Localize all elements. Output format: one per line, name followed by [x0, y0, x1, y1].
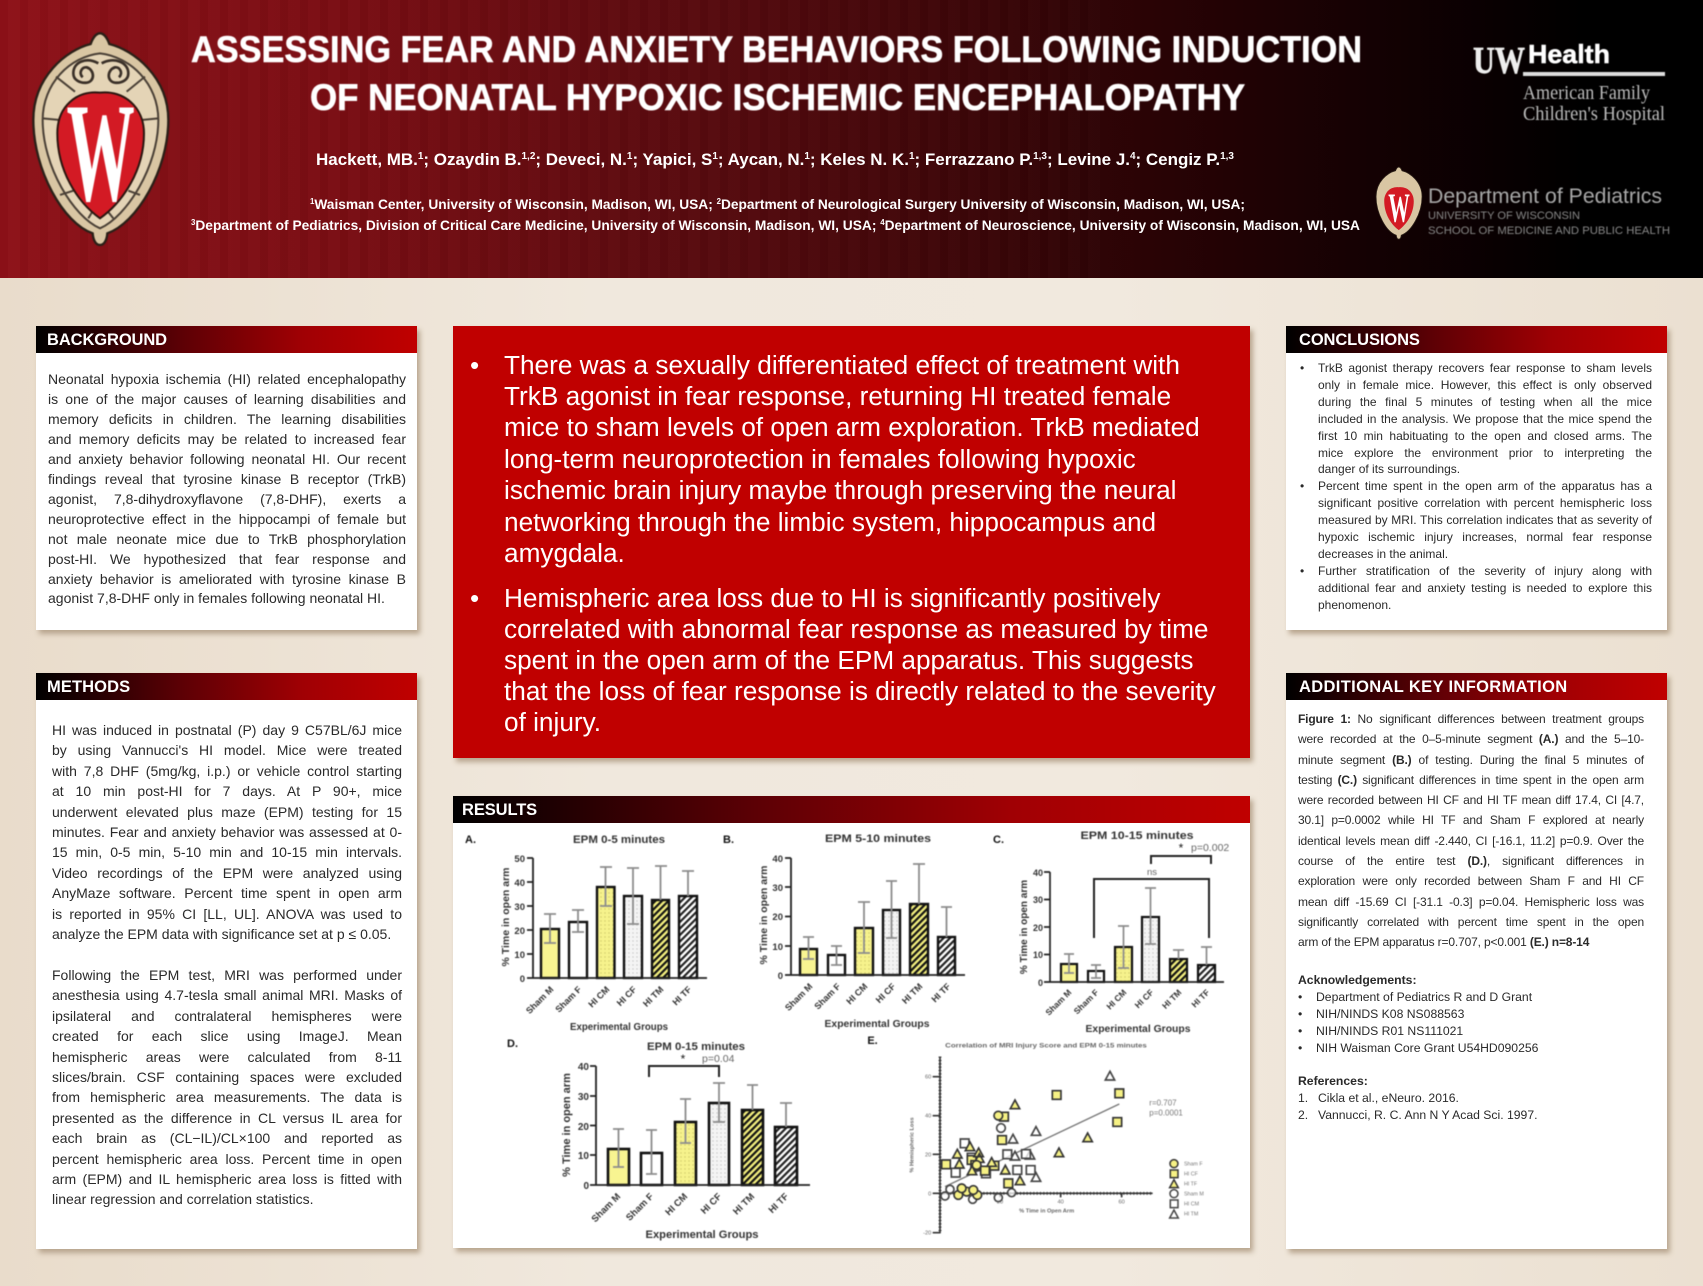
text: methods: underwent elevated plus maze (EPM) testing for 15: [52, 804, 402, 820]
text: acknowledgements: [1298, 973, 1538, 1055]
scatter legend: Sham F: [1184, 1161, 1203, 1167]
affiliations: 2: [717, 197, 721, 206]
chart A: EPM 0-5 minutes: HI CF: [615, 984, 639, 1008]
chart B: EPM 5-10 minutes: 10: [772, 942, 783, 953]
authors: Hackett, MB.: [316, 150, 418, 169]
affiliations: 4: [880, 218, 885, 227]
text: methods: by using Vannucci's HI model. Mice were treated: [52, 742, 402, 758]
text: methods: Video recordings of the EPM were analyzed using: [52, 865, 402, 881]
authors: ; Ferrazzano P.: [915, 150, 1033, 169]
text: acknowledgements: •: [1298, 1007, 1302, 1021]
chart C: EPM 10-15 minutes: 10: [1033, 950, 1043, 960]
text: background: findings reveal that tyrosine kinase B receptor (TrkB): [48, 471, 406, 487]
chart C: EPM 10-15 minutes: HI TF: [1189, 987, 1211, 1009]
chart E: correlation scatter: % Time in Open Arm: [1019, 1208, 1074, 1214]
chart B: EPM 5-10 minutes: % Time in open arm: [758, 866, 770, 964]
chart C: EPM 10-15 minutes: ns: [1147, 867, 1157, 878]
heading: background: [36, 326, 417, 353]
scatter legend: HI TF: [1184, 1181, 1198, 1187]
chart C: EPM 10-15 minutes: 30: [1033, 895, 1043, 905]
title: ASSESSING FEAR AND ANXIETY BEHAVIORS FOLLOWING INDUCTION: [191, 29, 1362, 70]
authors: ; Yapici, S: [632, 150, 712, 169]
chart C: EPM 10-15 minutes: Experimental Groups: [1086, 1024, 1191, 1035]
text: methods: ipsilateral and contralateral hemispheres were: [52, 1008, 402, 1024]
text: figure legend: mean diff -15.69 CI [-31.1 -0.3] p=0.04. Hemispheric loss was: [1298, 895, 1644, 909]
text: conclusions: included in the analysis. We propose that the mice spend the: [1318, 412, 1652, 426]
affiliations: Department of Neurological Surgery University of Wisconsin, Madison, WI, USA;: [721, 196, 1245, 212]
chart C: EPM 10-15 minutes: C.: [993, 834, 1004, 846]
chart E: correlation scatter: 0: [928, 1191, 931, 1197]
scatter legend: HI CM: [1184, 1201, 1199, 1207]
heading: results: RESULTS: [462, 801, 537, 819]
text: figure legend: [1298, 712, 1644, 949]
text: figure legend: Figure 1: No significant differences between treatment groups: [1298, 712, 1644, 726]
chart D: EPM 0-15 minutes: EPM 0-15 minutes: [647, 1041, 745, 1053]
chart B: EPM 5-10 minutes: 40: [772, 854, 783, 865]
chart B: EPM 5-10 minutes: HI CF: [874, 981, 898, 1005]
logo: UW Health: [1473, 39, 1665, 125]
chart A: EPM 0-5 minutes: [465, 834, 707, 1033]
affiliations: 3: [191, 218, 196, 227]
text: acknowledgements: NIH Waisman Core Grant U54HD090256: [1316, 1041, 1538, 1055]
text: conclusions: decreases in the animal.: [1318, 547, 1448, 561]
text: conclusions: additional fear and anxiety testing is needed to explore this: [1318, 581, 1652, 595]
chart E: correlation scatter: [867, 1035, 1204, 1237]
key finding 2: spent in the open arm of the EPM apparatus. This suggests: [504, 645, 1194, 675]
chart D: EPM 0-15 minutes: 40: [578, 1062, 589, 1073]
chart E: correlation scatter: Correlation of MRI Injury Score and EPM 0-15 minutes: [945, 1042, 1147, 1049]
logo: UW Health: Children's Hospital: [1523, 103, 1665, 125]
text: conclusions: Further stratification of the severity of injury along with: [1318, 564, 1652, 578]
chart A: EPM 0-5 minutes: 10: [514, 950, 525, 961]
authors: 1: [804, 151, 810, 162]
chart D: EPM 0-15 minutes: Sham M: [590, 1191, 623, 1225]
text: methods: each brain as (CL−IL)/CL×100 and reported as: [52, 1130, 402, 1146]
text: methods: percent hemispheric area loss. Percent time in open: [52, 1151, 402, 1167]
heading: methods: [36, 673, 417, 700]
chart E: correlation scatter: 20: [925, 1152, 931, 1158]
chart D: EPM 0-15 minutes: [507, 1038, 810, 1241]
text: background: and anxiety behavior following neonatal HI. Our recent: [48, 451, 406, 467]
panel: conclusions: [1286, 326, 1667, 630]
chart A: EPM 0-5 minutes: 30: [514, 902, 525, 913]
text: methods: anesthesia using 4.7-tesla small animal MRI. Masks of: [52, 987, 402, 1003]
logo: UW Health: American Family: [1523, 82, 1650, 104]
key finding 2: •: [470, 583, 479, 613]
text: methods: presented as the difference in CL versus IL area for: [52, 1110, 402, 1126]
scatter legend: [1170, 1160, 1204, 1218]
chart D: EPM 0-15 minutes: *: [681, 1052, 686, 1066]
text: figure legend: were recorded at the 0–5-minute segment (A.) and the 5–10-: [1298, 732, 1644, 746]
text: figure legend: 30.1] p=0.0002 while HI TF and Sham F explored at nearly: [1298, 813, 1644, 827]
title: [191, 29, 1362, 118]
text: conclusions: •: [1300, 479, 1304, 493]
key finding 1: •: [470, 350, 479, 380]
affiliations: Department of Pediatrics, Division of Critical Care Medicine, University of Wisconsin, Madison, WI, USA;: [195, 217, 880, 233]
chart C: EPM 10-15 minutes: Sham M: [1043, 987, 1073, 1017]
text: figure legend: significantly correlated with percent time spent in the open: [1298, 915, 1644, 929]
chart D: EPM 0-15 minutes: p=0.04: [702, 1053, 735, 1065]
text: references: 2.: [1298, 1108, 1308, 1122]
text: conclusions: phenomenon.: [1318, 598, 1391, 612]
text: conclusions: [1300, 361, 1652, 612]
text: conclusions: only in female mice. However, this effect is only observed: [1318, 378, 1652, 392]
chart E: correlation scatter: 20: [997, 1199, 1003, 1205]
affiliations: Department of Neuroscience, University of Wisconsin, Madison, WI, USA: [885, 217, 1360, 233]
key finding 1: TrkB agonist in fear response, returning HI treated female: [504, 381, 1171, 411]
heading: conclusions: CONCLUSIONS: [1299, 331, 1420, 349]
chart B: EPM 5-10 minutes: Sham F: [812, 981, 843, 1011]
text: methods: from hemispheric area measurements. The data is: [52, 1089, 402, 1105]
chart D: EPM 0-15 minutes: 20: [578, 1122, 589, 1133]
authors: 1: [712, 151, 718, 162]
chart E: correlation scatter: 40: [925, 1114, 931, 1120]
chart D: EPM 0-15 minutes: 10: [578, 1151, 589, 1162]
text: acknowledgements: NIH/NINDS K08 NS088563: [1316, 1007, 1464, 1021]
chart A: EPM 0-5 minutes: Sham F: [553, 984, 584, 1014]
icon: small crest: W: [1388, 186, 1410, 231]
chart E: correlation scatter: p=0.0001: [1149, 1108, 1183, 1117]
chart B: EPM 5-10 minutes: [723, 833, 965, 1030]
text: figure legend: arm of the EPM apparatus r=0.707, p<0.001 (E.) n=8-14: [1298, 935, 1589, 949]
chart D: EPM 0-15 minutes: Experimental Groups: [646, 1229, 758, 1241]
chart C: EPM 10-15 minutes: Sham F: [1072, 987, 1100, 1016]
chart E: correlation scatter: -20: [923, 1231, 931, 1237]
authors: ; Levine J.: [1047, 150, 1130, 169]
authors: 1,3: [1220, 151, 1234, 162]
text: acknowledgements: •: [1298, 1041, 1302, 1055]
chart A: EPM 0-5 minutes: HI CM: [586, 984, 611, 1009]
icon: small crest: [1376, 167, 1422, 239]
text: references: [1298, 1074, 1538, 1122]
chart C: EPM 10-15 minutes: 0: [1038, 978, 1043, 988]
text: conclusions: during the final 5 minutes of testing when all the mice: [1318, 395, 1652, 409]
key finding 1: ischemic brain injury maybe through preserving the neural: [504, 475, 1176, 505]
authors: 4: [1130, 151, 1136, 162]
chart B: EPM 5-10 minutes: 0: [778, 971, 783, 982]
text: background: agonist 7,8-DHF only in females following neonatal HI.: [48, 590, 385, 606]
icon: university crest: [33, 33, 168, 245]
key finding 2: of injury.: [504, 707, 601, 737]
text: references: 1.: [1298, 1091, 1308, 1105]
text: background: post-HI. We hypothesized that fear response and: [48, 551, 406, 567]
chart A: EPM 0-5 minutes: % Time in open arm: [500, 868, 512, 966]
chart D: EPM 0-15 minutes: Sham F: [624, 1191, 656, 1223]
chart B: EPM 5-10 minutes: HI TF: [929, 981, 953, 1004]
chart E: correlation scatter: r=0.707: [1149, 1098, 1177, 1107]
text: methods: at 10 min post-HI for 7 days. At P 90+, mice: [52, 783, 402, 799]
text: conclusions: mice explore the environment prior to interpreting the: [1318, 446, 1652, 460]
text: conclusions: significant positive correlation with percent hemispheric loss: [1318, 496, 1652, 510]
panel: additional key information: [1286, 673, 1667, 1249]
key finding 1: [470, 350, 1200, 568]
text: figure legend: minute segment (B.) of testing. During the final 5 minutes of: [1298, 753, 1644, 767]
chart C: EPM 10-15 minutes: % Time in open arm: [1019, 880, 1030, 974]
authors: 1: [418, 151, 424, 162]
text: background: neuroprotective effect in the hippocampi of female but: [48, 511, 406, 527]
chart C: EPM 10-15 minutes: EPM 10-15 minutes: [1080, 830, 1194, 842]
text: references: References:: [1298, 1074, 1368, 1088]
heading: additional key information: ADDITIONAL KEY INFORMATION: [1299, 678, 1568, 696]
text: conclusions: hypoxic ischemic injury increases, normal fear response: [1318, 530, 1652, 544]
chart A: EPM 0-5 minutes: 40: [514, 878, 525, 889]
chart E: correlation scatter: 60: [1118, 1199, 1125, 1205]
authors: 1,2: [522, 151, 536, 162]
chart E: correlation scatter: 60: [925, 1075, 931, 1081]
chart B: EPM 5-10 minutes: 20: [772, 912, 783, 923]
logo: UW Health: Health: [1528, 39, 1610, 69]
text: methods: [52, 722, 402, 1207]
text: acknowledgements: Acknowledgements:: [1298, 973, 1417, 987]
text: acknowledgements: •: [1298, 990, 1302, 1004]
text: conclusions: danger of its surroundings.: [1318, 462, 1460, 476]
chart E: correlation scatter: % Hemispheric Loss: [909, 1117, 915, 1173]
key finding 2: correlated with abnormal fear response as measured by time: [504, 614, 1208, 644]
text: references: Vannucci, R. C. Ann N Y Acad Sci. 1997.: [1318, 1108, 1538, 1122]
text: background: is one of the major causes of learning disabilities and: [48, 391, 406, 407]
text: acknowledgements: •: [1298, 1024, 1302, 1038]
authors: 1,3: [1033, 151, 1047, 162]
chart D: EPM 0-15 minutes: HI TF: [767, 1191, 791, 1216]
authors: ; Keles N. K.: [810, 150, 909, 169]
banner text and logos: [32, 29, 1670, 247]
chart D: EPM 0-15 minutes: HI TM: [731, 1191, 757, 1217]
text: acknowledgements: Department of Pediatrics R and D Grant: [1316, 990, 1532, 1004]
text: conclusions: Percent time spent in the open arm of the apparatus has a: [1318, 479, 1652, 493]
text: figure legend: identical levels mean diff -2.440, CI [-16.1, 11.2] p=0.9. Over the: [1298, 834, 1644, 848]
chart C: EPM 10-15 minutes: [993, 830, 1229, 1035]
text: figure legend: testing (C.) significant differences in time spent in the open arm: [1298, 773, 1644, 787]
text: figure legend: course of the entire test (D.), significant differences in: [1298, 854, 1644, 868]
chart A: EPM 0-5 minutes: A.: [465, 834, 476, 846]
text: acknowledgements: NIH/NINDS R01 NS111021: [1316, 1024, 1463, 1038]
logo: Department of Pediatrics: Department of Pediatrics: [1428, 185, 1662, 208]
chart A: EPM 0-5 minutes: Sham M: [524, 984, 555, 1016]
authors: 1: [627, 151, 633, 162]
chart A: EPM 0-5 minutes: 50: [514, 854, 525, 865]
chart D: EPM 0-15 minutes: 0: [583, 1181, 589, 1192]
logo: Department of Pediatrics: [1428, 185, 1670, 237]
chart B: EPM 5-10 minutes: B.: [723, 834, 734, 846]
heading: background: BACKGROUND: [47, 331, 167, 349]
heading: methods: METHODS: [47, 678, 130, 696]
chart B: EPM 5-10 minutes: Sham M: [783, 981, 814, 1013]
panel: key findings: [453, 326, 1250, 758]
chart B: EPM 5-10 minutes: EPM 5-10 minutes: [825, 833, 931, 845]
chart C: EPM 10-15 minutes: HI CM: [1104, 987, 1128, 1011]
text: methods: AnyMaze software. Percent time spent in open arm: [52, 885, 402, 901]
key finding 1: long-term neuroprotection in females following hypoxic: [504, 444, 1136, 474]
chart D: EPM 0-15 minutes: HI CM: [663, 1191, 690, 1218]
heading: conclusions: [1286, 326, 1667, 353]
authors: ; Aycan, N.: [718, 150, 804, 169]
chart D: EPM 0-15 minutes: 30: [578, 1092, 589, 1103]
text: background: not male neonate mice due to TrkB phosphorylation: [48, 531, 406, 547]
authors: ; Cengiz P.: [1136, 150, 1220, 169]
affiliations: [191, 196, 1360, 233]
chart B: EPM 5-10 minutes: 30: [772, 883, 783, 894]
chart C: EPM 10-15 minutes: 40: [1033, 868, 1043, 878]
key finding 2: Hemispheric area loss due to HI is significantly positively: [504, 583, 1160, 613]
title: OF NEONATAL HYPOXIC ISCHEMIC ENCEPHALOPATHY: [310, 77, 1245, 118]
text: figure legend: exploration were only recorded between Sham F and HI CF: [1298, 874, 1644, 888]
chart A: EPM 0-5 minutes: EPM 0-5 minutes: [573, 834, 665, 846]
chart A: EPM 0-5 minutes: HI TF: [670, 984, 694, 1007]
icon: university crest: W: [66, 74, 135, 231]
scatter legend: HI CF: [1184, 1171, 1199, 1177]
chart C: EPM 10-15 minutes: HI CF: [1133, 987, 1155, 1010]
text: methods: analyze the EPM data with significance set at p ≤ 0.05.: [52, 926, 391, 942]
text: methods: arm (EPM) and IL hemispheric area loss is fitted with: [52, 1171, 402, 1187]
text: methods: created for each slice using ImageJ. Mean: [52, 1028, 402, 1044]
text: figure legend: were recorded between HI CF and HI TF mean diff 17.4, CI [4.7,: [1298, 793, 1644, 807]
text: conclusions: •: [1300, 361, 1304, 375]
text: methods: with 7,8 DHF (5mg/kg, i.p.) or vehicle control starting: [52, 763, 402, 779]
chart E: correlation scatter: E.: [867, 1035, 878, 1047]
key finding 1: There was a sexually differentiated effect of treatment with: [504, 350, 1180, 380]
key finding 2: that the loss of fear response is directly related to the severity: [504, 676, 1216, 706]
scatter legend: Sham M: [1184, 1191, 1204, 1197]
text: background: agonist, 7,8-dihydroxyflavone (7,8-DHF), exerts a: [48, 491, 406, 507]
banner: [0, 0, 1703, 278]
text: methods: slices/brain. CSF containing spaces were excluded: [52, 1069, 402, 1085]
text: methods: Following the EPM test, MRI was performed under: [52, 967, 402, 983]
text: references: Cikla et al., eNeuro. 2016.: [1318, 1091, 1459, 1105]
text: methods: HI was induced in postnatal (P) day 9 C57BL/6J mice: [52, 722, 402, 738]
affiliations: 1: [310, 197, 315, 206]
chart E: correlation scatter: 40: [1057, 1199, 1064, 1205]
text: conclusions: first 10 min habituating to the open and closed arms. The: [1318, 429, 1652, 443]
chart A: EPM 0-5 minutes: HI TM: [641, 984, 665, 1009]
logo: Department of Pediatrics: SCHOOL OF MEDICINE AND PUBLIC HEALTH: [1428, 225, 1670, 237]
chart C: EPM 10-15 minutes: HI TM: [1160, 987, 1183, 1011]
chart C: EPM 10-15 minutes: 20: [1033, 923, 1043, 933]
chart B: EPM 5-10 minutes: HI TM: [900, 981, 924, 1006]
panel: results: [453, 796, 1250, 1248]
chart A: EPM 0-5 minutes: 0: [520, 974, 525, 985]
authors: 1: [909, 151, 915, 162]
text: background: [48, 371, 406, 606]
text: conclusions: •: [1300, 564, 1304, 578]
text: methods: linear regression and correlation statistics.: [52, 1191, 313, 1207]
text: background: memory deficits in children. The learning disabilities: [48, 411, 406, 427]
chart B: EPM 5-10 minutes: Experimental Groups: [824, 1019, 930, 1030]
text: methods: hemispheric areas were calculated from 8-11: [52, 1048, 402, 1064]
panel: methods: [36, 673, 417, 1249]
scatter legend: HI TM: [1184, 1212, 1198, 1218]
chart D: EPM 0-15 minutes: D.: [507, 1038, 518, 1050]
text: background: Neonatal hypoxia ischemia (HI) related encephalopathy: [48, 371, 406, 387]
chart D: EPM 0-15 minutes: HI CF: [699, 1191, 724, 1217]
heading: results: [453, 796, 1250, 823]
key finding 2: [470, 583, 1216, 737]
banner stripes: [0, 0, 1100, 278]
chart B: EPM 5-10 minutes: HI CM: [844, 981, 869, 1006]
chart A: EPM 0-5 minutes: Experimental Groups: [570, 1022, 668, 1033]
logo: UW Health: UW: [1473, 40, 1525, 82]
text: methods: is reported in 95% CI [LL, UL]. ANOVA was used to: [52, 906, 402, 922]
text: background: and memory deficits may be related to increased fear: [48, 431, 406, 447]
authors: ; Deveci, N.: [535, 150, 627, 169]
text: methods: minutes. Fear and anxiety behavior was assessed at 0-: [52, 824, 402, 840]
chart A: EPM 0-5 minutes: 20: [514, 926, 525, 937]
logo: Department of Pediatrics: UNIVERSITY OF WISCONSIN: [1428, 210, 1580, 222]
panel: background: [36, 326, 417, 630]
chart D: EPM 0-15 minutes: % Time in open arm: [561, 1073, 573, 1177]
heading: additional key information: [1286, 673, 1667, 700]
authors: ; Ozaydin B.: [423, 150, 522, 169]
text: conclusions: TrkB agonist therapy recovers fear response to sham levels: [1318, 361, 1652, 375]
text: conclusions: measured by MRI. This correlation indicates that as severity of: [1318, 513, 1652, 527]
text: background: anxiety behavior is ameliorated with tyrosine kinase B: [48, 571, 406, 587]
affiliations: Waisman Center, University of Wisconsin, Madison, WI, USA;: [314, 196, 717, 212]
key finding 1: networking through the limbic system, hippocampus and: [504, 506, 1156, 536]
chart C: EPM 10-15 minutes: *: [1179, 841, 1184, 855]
key finding 1: amygdala.: [504, 538, 625, 568]
chart C: EPM 10-15 minutes: p=0.002: [1191, 842, 1229, 854]
key finding 1: mice to sham levels of open arm exploration. TrkB mediated: [504, 412, 1200, 442]
text: methods: 15 min, 0-5 min, 5-10 min and 10-15 min intervals.: [52, 844, 402, 860]
